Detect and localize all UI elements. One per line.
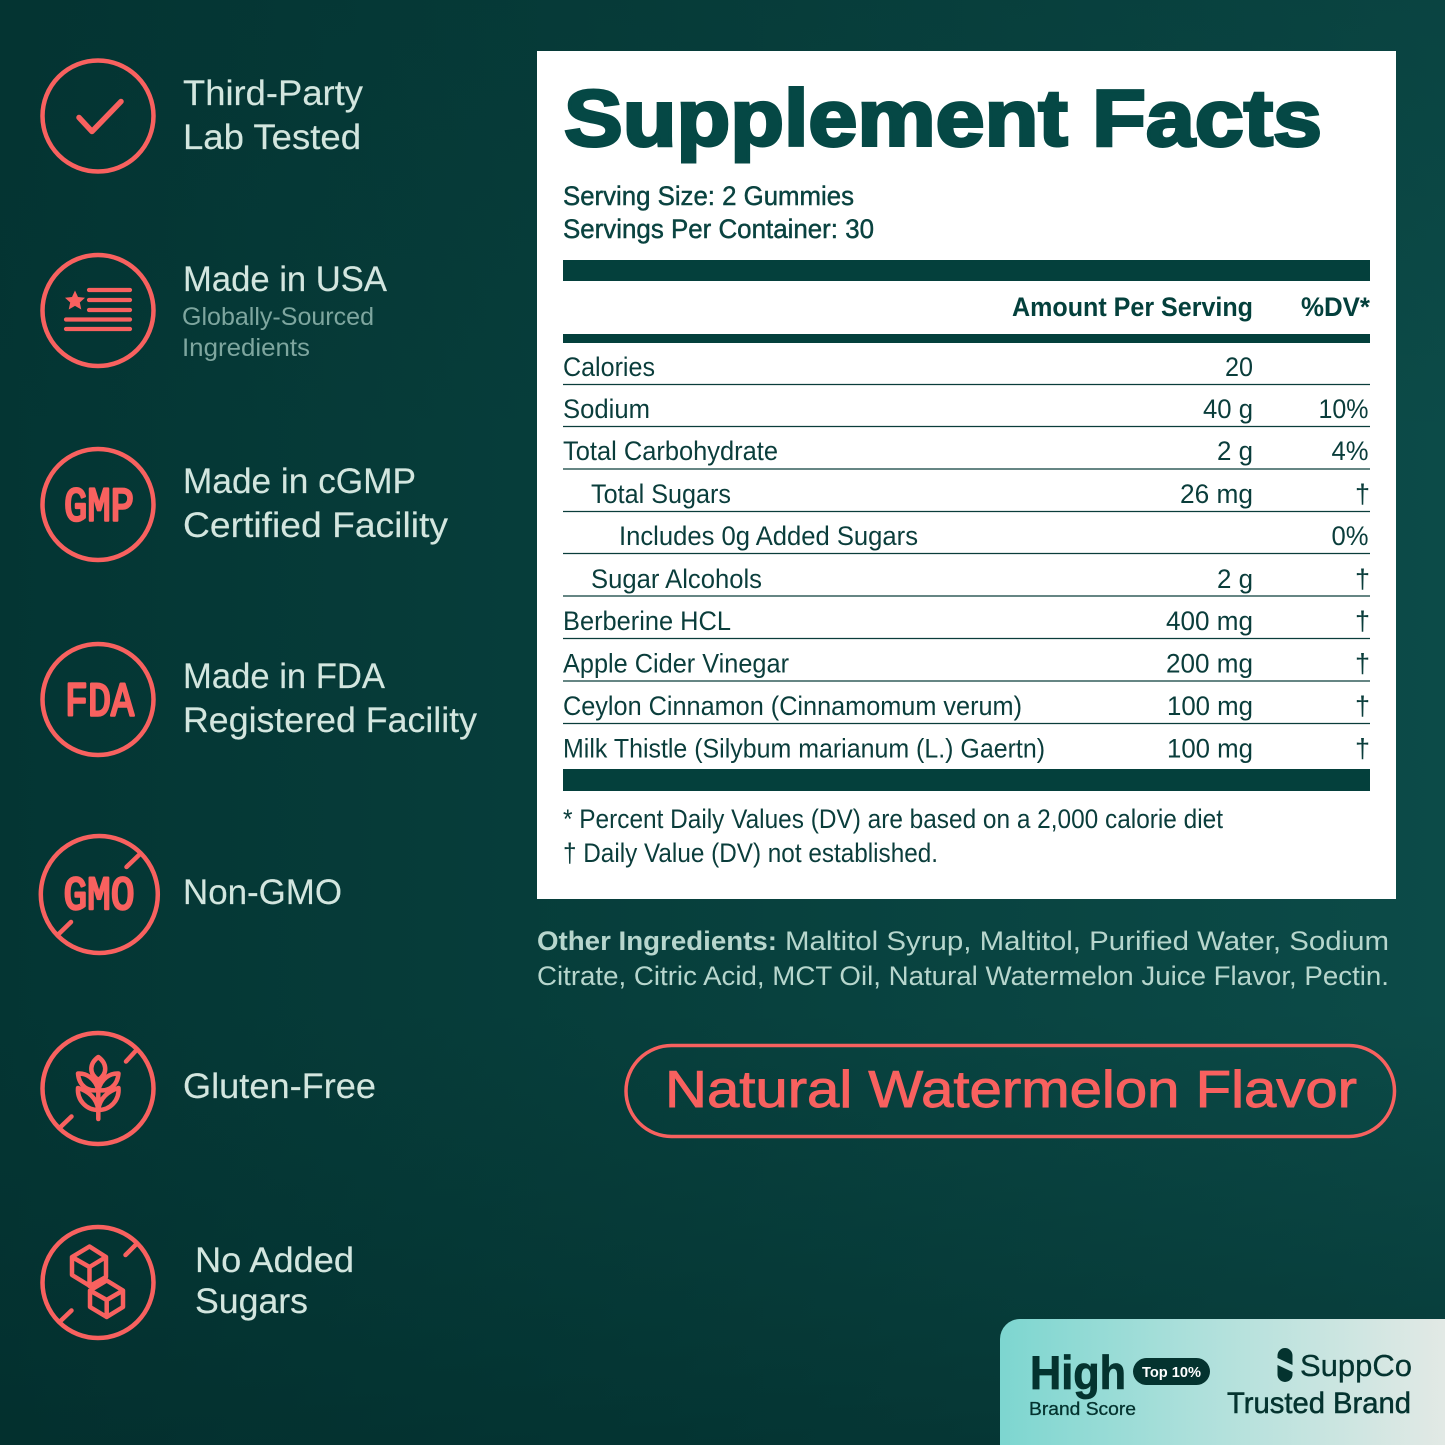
nutrition table rows: 2 g bbox=[1217, 564, 1253, 594]
nutrition table rows: Total Sugars bbox=[591, 479, 731, 509]
panel: supplement facts bbox=[537, 51, 1396, 899]
label: non-GMO: Non-GMO bbox=[183, 873, 342, 912]
nutrition table rows: Berberine HCL bbox=[563, 606, 731, 636]
label: cGMP facility bbox=[183, 462, 449, 545]
badge: FDA facility bbox=[42, 644, 477, 755]
high score: High bbox=[1030, 1346, 1126, 1399]
badge: third-party lab tested bbox=[42, 60, 364, 172]
label: cGMP facility: Certified Facility bbox=[183, 506, 449, 545]
other ingredients text: Other Ingredients: bbox=[537, 926, 777, 956]
footnotes: * Percent Daily Values (DV) are based on a 2,000 calorie diet bbox=[563, 804, 1223, 834]
brand score badge bbox=[1000, 1319, 1445, 1445]
label: third-party lab tested bbox=[183, 74, 364, 157]
label: gluten-free: Gluten-Free bbox=[183, 1067, 376, 1106]
nutrition table rows: Calories bbox=[563, 352, 655, 382]
other ingredients text: Maltitol Syrup, Maltitol, Purified Water, Sodium bbox=[785, 926, 1389, 956]
nutrition table rows: 400 mg bbox=[1166, 606, 1253, 636]
icon: GMP bbox=[42, 449, 154, 560]
icon: flag bbox=[42, 255, 154, 366]
label: made in USA: Ingredients bbox=[182, 334, 310, 362]
label: third-party lab tested: Third-Party bbox=[183, 74, 364, 113]
nutrition table rows: 26 mg bbox=[1180, 479, 1253, 509]
label: third-party lab tested: Lab Tested bbox=[183, 118, 361, 157]
nutrition table rows: Milk Thistle (Silybum marianum (L.) Gaertn) bbox=[563, 734, 1045, 764]
flavor callout pill: Natural Watermelon Flavor bbox=[665, 1061, 1357, 1119]
label: FDA facility bbox=[183, 657, 477, 740]
nutrition table rows: Total Carbohydrate bbox=[563, 436, 778, 466]
icon: SuppCo logo bbox=[1278, 1348, 1292, 1382]
other ingredients text bbox=[537, 926, 1389, 991]
nutrition table rows: † bbox=[1355, 691, 1370, 721]
badge: non-GMO bbox=[41, 836, 342, 953]
table top bar bbox=[563, 260, 1370, 281]
icon: FDA: FDA bbox=[65, 676, 134, 730]
nutrition table rows: † bbox=[1355, 479, 1370, 509]
nutrition table rows: Apple Cider Vinegar bbox=[563, 648, 789, 678]
top 10% pill bbox=[1133, 1358, 1210, 1385]
label: no added sugars bbox=[195, 1241, 354, 1321]
table header: Amount Per Serving bbox=[1012, 292, 1253, 322]
serving info bbox=[563, 181, 874, 244]
nutrition table rows: 200 mg bbox=[1166, 648, 1253, 678]
nutrition table rows: Includes 0g Added Sugars bbox=[619, 521, 918, 551]
nutrition table rows: 4% bbox=[1332, 436, 1368, 466]
icon: check mark bbox=[42, 60, 154, 172]
nutrition table rows: Ceylon Cinnamon (Cinnamomum verum) bbox=[563, 691, 1022, 721]
label: FDA facility: Made in FDA bbox=[183, 657, 386, 696]
label: no added sugars: Sugars bbox=[195, 1282, 308, 1321]
label: made in USA bbox=[182, 260, 388, 362]
nutrition table rows: 40 g bbox=[1203, 394, 1253, 424]
flavor callout pill bbox=[626, 1046, 1394, 1136]
other ingredients text: Citrate, Citric Acid, MCT Oil, Natural Watermelon Juice Flavor, Pectin. bbox=[537, 961, 1389, 991]
top 10% pill: Top 10% bbox=[1142, 1364, 1201, 1381]
badge: cGMP facility bbox=[42, 449, 449, 560]
label: made in USA: Globally-Sourced bbox=[182, 303, 374, 331]
label: FDA facility: Registered Facility bbox=[183, 701, 477, 740]
SuppCo name: SuppCo bbox=[1300, 1348, 1412, 1383]
icon: GMO crossed bbox=[41, 836, 158, 953]
serving info: Servings Per Container: 30 bbox=[563, 214, 874, 244]
badge: gluten-free bbox=[42, 1033, 376, 1144]
nutrition table rows: † bbox=[1355, 606, 1370, 636]
nutrition table rows: 100 mg bbox=[1167, 691, 1253, 721]
label: made in USA: Made in USA bbox=[183, 260, 388, 299]
label: no added sugars: No Added bbox=[195, 1241, 354, 1280]
table bottom bar bbox=[563, 769, 1370, 791]
table header: %DV* bbox=[1301, 292, 1370, 322]
nutrition table rows: Sodium bbox=[563, 394, 650, 424]
trusted brand: Trusted Brand bbox=[1227, 1387, 1411, 1420]
serving info: Serving Size: 2 Gummies bbox=[563, 181, 854, 211]
icon: GMO crossed: GMO bbox=[64, 871, 134, 924]
heading: supplement facts: Supplement Facts bbox=[564, 74, 1322, 162]
nutrition table rows: Sugar Alcohols bbox=[591, 564, 762, 594]
footnotes: † Daily Value (DV) not established. bbox=[563, 838, 938, 868]
nutrition table rows bbox=[563, 352, 1370, 764]
nutrition table rows: 2 g bbox=[1217, 436, 1253, 466]
header rule bbox=[563, 334, 1370, 343]
nutrition table rows: † bbox=[1355, 734, 1370, 764]
icon: sugar cubes crossed bbox=[42, 1227, 154, 1338]
nutrition table rows: 100 mg bbox=[1167, 734, 1253, 764]
brand score label: Brand Score bbox=[1029, 1399, 1136, 1419]
nutrition table rows: 20 bbox=[1225, 352, 1253, 382]
icon: GMP: GMP bbox=[64, 482, 134, 536]
badge: no added sugars bbox=[42, 1227, 354, 1338]
icon: FDA bbox=[42, 644, 154, 755]
footnotes bbox=[563, 804, 1223, 868]
nutrition table rows: † bbox=[1355, 564, 1370, 594]
nutrition table rows: 10% bbox=[1318, 394, 1368, 424]
label: cGMP facility: Made in cGMP bbox=[183, 462, 416, 501]
nutrition table rows: † bbox=[1355, 648, 1370, 678]
badge: made in USA bbox=[42, 255, 388, 366]
nutrition table rows: 0% bbox=[1332, 521, 1368, 551]
icon: wheat crossed bbox=[42, 1033, 154, 1144]
